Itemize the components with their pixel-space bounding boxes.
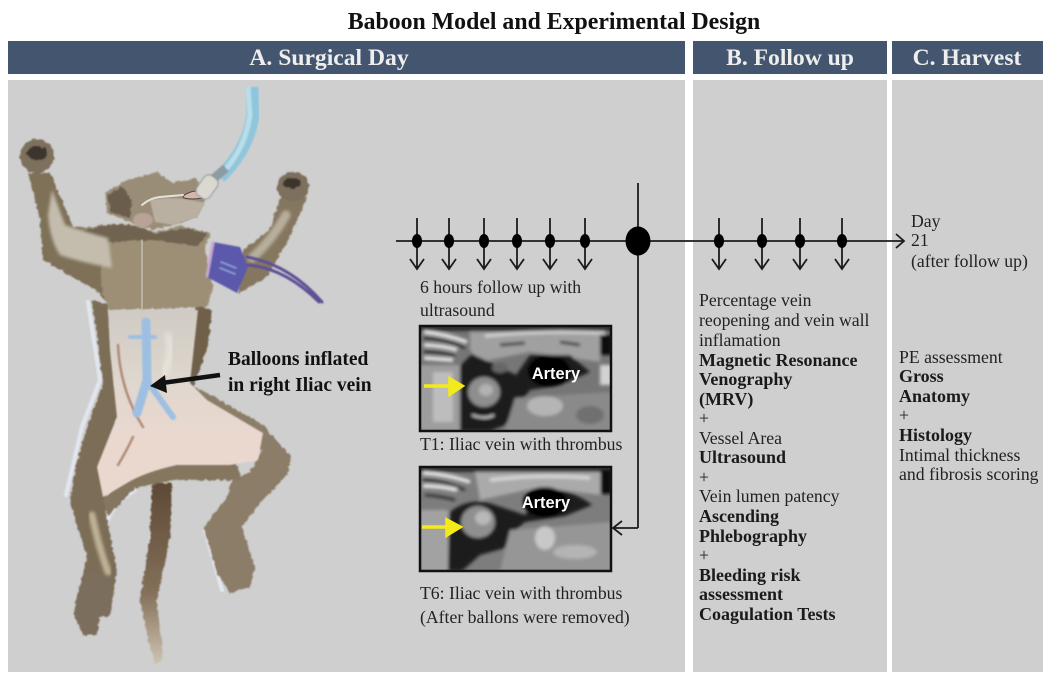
chest shadow xyxy=(80,225,208,246)
text: follow up assessments: Ultrasound xyxy=(699,447,786,467)
text: follow up assessments: Ascending xyxy=(699,506,779,526)
text: follow up assessments: Coagulation Tests xyxy=(699,604,836,624)
panel: surgical day xyxy=(8,80,685,672)
label: 6 hours follow up xyxy=(420,277,581,320)
timeline xyxy=(396,183,904,535)
chest fur xyxy=(77,224,213,310)
label: balloons inflated xyxy=(228,349,372,396)
caption T1: T1: Iliac vein with thrombus xyxy=(420,434,623,454)
mouth xyxy=(183,191,203,199)
left arm skin xyxy=(48,190,112,268)
left side and left leg xyxy=(70,300,118,635)
text: harvest assessments: Anatomy xyxy=(899,386,970,406)
header: C. Harvest: C. Harvest xyxy=(913,45,1022,71)
caption T6: (After ballons were removed) xyxy=(420,607,630,627)
incision marks xyxy=(118,345,143,465)
yellow arrow T1 xyxy=(424,379,462,394)
header: A. Surgical Day xyxy=(8,41,685,74)
text: follow up assessments: + xyxy=(699,467,709,487)
text: follow up assessments: Vessel Area xyxy=(699,428,782,448)
label: 6 hours follow up: 6 hours follow up with xyxy=(420,277,581,297)
fur shapes xyxy=(20,139,309,664)
ultrasound T6 xyxy=(419,466,612,572)
label: 6 hours follow up: ultrasound xyxy=(420,300,495,320)
ultrasound T1 xyxy=(419,325,612,432)
neck xyxy=(133,213,153,227)
label: day 21: Day xyxy=(911,211,941,231)
text: harvest assessments: + xyxy=(899,405,909,425)
text: follow up assessments: reopening and vein wall xyxy=(699,310,870,330)
under pelvis fur xyxy=(103,460,242,516)
header: B. Follow up xyxy=(693,41,887,74)
right thigh and lower leg xyxy=(188,384,291,593)
artery label T6: Artery xyxy=(522,494,571,512)
panel: harvest xyxy=(892,80,1043,672)
balloon catheter veins xyxy=(130,322,173,417)
label: balloons inflated: Balloons inflated xyxy=(228,349,368,370)
right fist xyxy=(277,172,309,202)
big time point xyxy=(626,226,650,256)
text: harvest assessments: PE assessment xyxy=(899,347,1003,367)
header: C. Harvest xyxy=(892,41,1043,74)
text: harvest assessments: Gross xyxy=(899,366,944,386)
header: B. Follow up: B. Follow up xyxy=(726,45,854,71)
text: follow up assessments: Venography xyxy=(699,369,792,389)
illustration: baboon xyxy=(20,87,322,664)
text: harvest assessments: and fibrosis scoring xyxy=(899,464,1039,484)
text: follow up assessments: Magnetic Resonance xyxy=(699,350,857,370)
label: balloons inflated: in right Iliac vein xyxy=(228,375,372,396)
text: follow up assessments: assessment xyxy=(699,584,783,604)
time points with arrows xyxy=(410,218,849,269)
back of head shadow xyxy=(107,186,132,218)
title: Baboon Model and Experimental Design xyxy=(348,9,760,35)
text: follow up assessments: + xyxy=(699,408,709,428)
text: follow up assessments: + xyxy=(699,545,709,565)
endotracheal tube xyxy=(194,87,253,201)
left arm xyxy=(28,173,115,313)
right arm xyxy=(238,197,307,293)
blood pressure cuff xyxy=(207,242,322,302)
label: day 21 xyxy=(911,211,1028,271)
belly skin xyxy=(97,310,263,497)
left leg highlight xyxy=(92,515,108,572)
header: A. Surgical Day: A. Surgical Day xyxy=(249,45,409,71)
nasal cannula xyxy=(142,195,183,205)
text: follow up assessments: Percentage vein xyxy=(699,290,812,310)
left foot xyxy=(73,572,112,635)
text: harvest assessments: Intimal thickness xyxy=(899,445,1020,465)
panel: follow up xyxy=(693,80,887,672)
caption T6 xyxy=(420,583,630,627)
right arm skin xyxy=(252,215,286,258)
arrow: balloons xyxy=(150,375,220,393)
caption T6: T6: Iliac vein with thrombus xyxy=(420,583,623,603)
tail xyxy=(140,483,172,664)
text: follow up assessments: Vein lumen patency xyxy=(699,486,840,506)
text: follow up assessments: inflamation xyxy=(699,330,781,350)
body halo xyxy=(66,302,222,590)
chest midline xyxy=(141,240,143,320)
text: harvest assessments: Histology xyxy=(899,425,972,445)
text: harvest assessments xyxy=(899,347,1039,484)
label: day 21: 21 xyxy=(911,230,929,250)
belly highlight xyxy=(164,335,170,375)
head xyxy=(105,172,205,230)
left fist xyxy=(20,139,54,173)
right side xyxy=(185,305,212,398)
yellow arrow T6 xyxy=(422,520,460,535)
text: follow up assessments: Bleeding risk xyxy=(699,565,801,585)
artery label T1: Artery xyxy=(532,365,581,383)
label: day 21: (after follow up) xyxy=(911,251,1028,271)
muzzle xyxy=(150,198,205,225)
text: follow up assessments xyxy=(699,290,870,624)
text: follow up assessments: Phlebography xyxy=(699,526,807,546)
text: follow up assessments: (MRV) xyxy=(699,389,753,410)
